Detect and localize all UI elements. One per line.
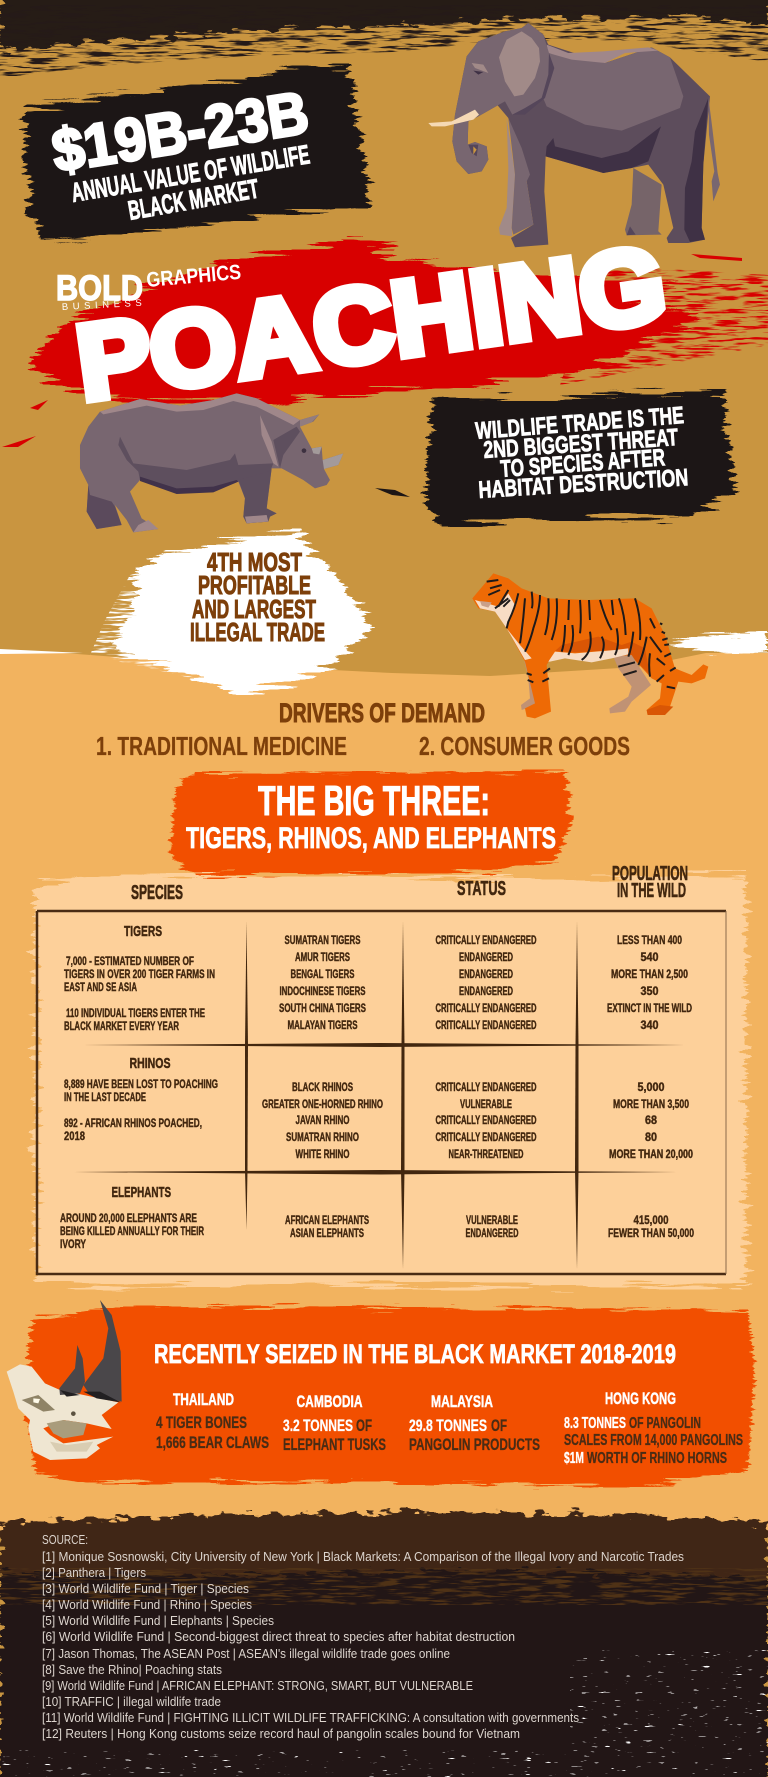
row: rhinos, subspecies: JAVAN RHINO (296, 1115, 350, 1127)
row: tigers, status: CRITICALLY ENDANGERED (436, 1003, 536, 1015)
sources list: [3] World Wildlife Fund | Tiger | Species (42, 1581, 249, 1596)
sources list: [11] World Wildlife Fund | FIGHTING ILLICIT WILDLIFE TRAFFICKING: A consultation with governments (42, 1710, 579, 1725)
background: white ground highlight right (671, 632, 768, 653)
red brush splash (2, 240, 768, 447)
caption line one: ANNUAL VALUE OF WILDLIFE (69, 139, 312, 208)
panel: market value (25, 65, 368, 243)
row: tigers, population: 350 (640, 986, 658, 998)
red splatter left (30, 400, 48, 410)
row: rhinos, population: MORE THAN 20,000 (609, 1149, 693, 1161)
headline value: $19B-23B (48, 79, 313, 185)
row: rhinos, population: MORE THAN 3,500 (613, 1099, 689, 1111)
column: Hong Kong: HONG KONG (605, 1389, 676, 1408)
column: Cambodia: OF (356, 1416, 372, 1435)
row: tigers, population: MORE THAN 2,500 (611, 969, 688, 981)
heading line one: THE BIG THREE: (258, 777, 490, 824)
row: tigers, population (607, 935, 692, 1032)
row: rhinos, status (436, 1082, 536, 1161)
main red stroke (24, 240, 700, 403)
row: tigers, subspecies: AMUR TIGERS (295, 952, 350, 964)
icon: tiger (472, 573, 708, 718)
black specks (375, 488, 410, 497)
header population: POPULATION (612, 863, 688, 885)
row: tigers, species notes: TIGERS IN OVER 200 TIGER FARMS IN (64, 969, 215, 981)
driver two: 2. CONSUMER GOODS (419, 731, 630, 761)
logo word BOLD: BOLD (56, 269, 143, 308)
row: rhinos, population (609, 1082, 693, 1161)
logo word GRAPHICS: GRAPHICS (145, 261, 242, 292)
row: elephants, population (608, 1215, 694, 1240)
driver one: 1. TRADITIONAL MEDICINE (96, 731, 347, 761)
header species: SPECIES (131, 882, 183, 904)
sources list (42, 1532, 684, 1741)
column: Hong Kong: $1M (564, 1450, 584, 1467)
row: elephants, status: ENDANGERED (466, 1228, 518, 1240)
callout text line four: HABITAT DESTRUCTION (478, 464, 689, 504)
row: tigers, species notes (64, 923, 215, 1033)
row: tigers, species notes: 110 INDIVIDUAL TIGERS ENTER THE (66, 1008, 205, 1020)
row: tigers, status: CRITICALLY ENDANGERED (436, 935, 536, 947)
sources list: [8] Save the Rhino| Poaching stats (42, 1662, 222, 1677)
column: Malaysia: OF (491, 1416, 507, 1435)
header status: STATUS (457, 878, 506, 900)
row: tigers, species notes: EAST AND SE ASIA (64, 982, 137, 994)
row: tigers, subspecies: BENGAL TIGERS (290, 969, 355, 981)
column: Malaysia: 29.8 TONNES (409, 1416, 487, 1435)
panel: table background (36, 874, 746, 1286)
row: rhinos, population: 68 (645, 1115, 658, 1127)
top dark brush band (0, 0, 768, 50)
row: elephants, species notes: BEING KILLED ANNUALLY FOR THEIR (60, 1226, 204, 1238)
footer brown streak texture (0, 1568, 768, 1605)
icon: rhino (80, 393, 343, 532)
logo word BUSINESS: BUSINESS (62, 298, 142, 313)
row: elephants, subspecies: ASIAN ELEPHANTS (290, 1228, 364, 1240)
row: tigers, population: 340 (640, 1020, 658, 1032)
title: POACHING (70, 225, 673, 423)
row: rhinos, species notes: 2018 (64, 1131, 85, 1143)
row: rhinos, species notes: RHINOS (130, 1055, 170, 1072)
row: rhinos, status: NEAR-THREATENED (448, 1149, 524, 1161)
heading: drivers of demand: DRIVERS OF DEMAND (279, 698, 485, 728)
row: tigers, species notes: TIGERS (124, 923, 162, 940)
column: Malaysia: MALAYSIA (431, 1392, 493, 1411)
row: rhinos, species notes: 8,889 HAVE BEEN LOST TO POACHING (64, 1079, 218, 1091)
column: Malaysia: PANGOLIN PRODUCTS (409, 1435, 540, 1454)
sources list: SOURCE: (42, 1532, 88, 1547)
row: tigers, status: ENDANGERED (459, 969, 513, 981)
column: Thailand: 4 TIGER BONES (156, 1413, 247, 1432)
caption line two: BLACK MARKET (126, 173, 261, 226)
red streak texture right (560, 265, 768, 385)
callout text line one: WILDLIFE TRADE IS THE (474, 402, 685, 445)
callout text line four: ILLEGAL TRADE (190, 617, 325, 647)
red splatter lower left (2, 436, 36, 447)
row: tigers, population: 540 (640, 952, 658, 964)
row: rhinos, status: CRITICALLY ENDANGERED (436, 1082, 536, 1094)
row: tigers, subspecies: MALAYAN TIGERS (288, 1020, 358, 1032)
row: tigers, species notes: BLACK MARKET EVERY YEAR (64, 1021, 179, 1033)
callout text line three: TO SPECIES AFTER (499, 444, 666, 483)
callout text line two: PROFITABLE (198, 570, 311, 600)
row: elephants, subspecies: AFRICAN ELEPHANTS (285, 1215, 369, 1227)
orange brush shape (24, 1306, 755, 1487)
row: rhinos, species notes (64, 1055, 218, 1143)
row: tigers, status: CRITICALLY ENDANGERED (436, 1020, 536, 1032)
heading panel: the big three (171, 772, 571, 875)
white brush shape (110, 530, 372, 697)
row: rhinos, subspecies: GREATER ONE-HORNED RHINO (262, 1099, 383, 1111)
row: rhinos, population: 80 (645, 1132, 657, 1144)
row: rhinos, subspecies (262, 1082, 383, 1161)
footer brown band (0, 1512, 768, 1610)
row: elephants, species notes: IVORY (60, 1239, 86, 1251)
white streak texture (90, 560, 200, 680)
sources list: [2] Panthera | Tigers (42, 1565, 146, 1580)
sources list: [1] Monique Sosnowski, City University of New York | Black Markets: A Comparison of the Illegal Ivory and Narcotic Trades (42, 1549, 684, 1564)
column: Thailand: THAILAND (173, 1390, 234, 1409)
row: rhinos, subspecies: BLACK RHINOS (292, 1082, 353, 1094)
column: Thailand: 1,666 BEAR CLAWS (156, 1433, 269, 1452)
row: rhinos, population: 5,000 (638, 1082, 664, 1094)
row: elephants, species notes: ELEPHANTS (112, 1184, 171, 1201)
sources list: [4] World Wildlife Fund | Rhino | Species (42, 1597, 252, 1612)
background: tan upper area (0, 0, 768, 660)
column: Cambodia: ELEPHANT TUSKS (283, 1435, 386, 1454)
row: tigers, subspecies: SOUTH CHINA TIGERS (279, 1003, 366, 1015)
column: Cambodia: CAMBODIA (296, 1392, 362, 1411)
top band dark streak texture (0, 5, 768, 78)
column: Hong Kong: OF PANGOLIN (629, 1415, 701, 1432)
panel: recently seized (24, 1306, 755, 1487)
background: white ground highlight left (0, 649, 83, 654)
row: rhinos, status: VULNERABLE (460, 1099, 512, 1111)
footer white specks right (570, 1650, 768, 1777)
row: tigers, status (436, 935, 536, 1032)
row: tigers, status: ENDANGERED (459, 952, 513, 964)
row: tigers, population: LESS THAN 400 (617, 935, 682, 947)
row: tigers, population: EXTINCT IN THE WILD (607, 1003, 692, 1015)
sources list: [7] Jason Thomas, The ASEAN Post | ASEAN's illegal wildlife trade goes online (42, 1646, 450, 1661)
row: elephants, subspecies (285, 1215, 369, 1240)
row: tigers, subspecies: SUMATRAN TIGERS (284, 935, 361, 947)
column: Thailand (156, 1390, 269, 1452)
column: Hong Kong (564, 1389, 743, 1467)
panel: fourth most profitable (90, 530, 372, 697)
row: rhinos, status: CRITICALLY ENDANGERED (436, 1115, 536, 1127)
column: Cambodia (283, 1392, 386, 1454)
table frame (37, 911, 726, 1274)
column: Cambodia: 3.2 TONNES (283, 1416, 353, 1435)
sources list: [12] Reuters | Hong Kong customs seize record haul of pangolin scales bound for Vietnam (42, 1726, 520, 1741)
background: tan ground hump under tiger (64, 653, 706, 676)
row: elephants, population: FEWER THAN 50,000 (608, 1228, 694, 1240)
row: rhinos, species notes: IN THE LAST DECADE (64, 1092, 146, 1104)
footer dark band (0, 1570, 768, 1777)
row: rhinos, subspecies: WHITE RHINO (296, 1149, 350, 1161)
orange brush shape (171, 772, 571, 875)
row: rhinos, species notes: 892 - AFRICAN RHINOS POACHED, (64, 1118, 202, 1130)
logo: Bold Business Graphics (56, 261, 242, 313)
callout text line one: 4TH MOST (207, 547, 302, 577)
row: tigers, status: ENDANGERED (459, 986, 513, 998)
row: elephants, population: 415,000 (634, 1215, 668, 1227)
icon: rhino skull (7, 1300, 122, 1460)
background: light sand lower area (0, 653, 768, 1533)
row: elephants, status (466, 1215, 518, 1240)
heading line two: TIGERS, RHINOS, AND ELEPHANTS (186, 822, 556, 855)
column: Malaysia (409, 1392, 540, 1454)
black brush shape (426, 392, 735, 523)
sources list: [5] World Wildlife Fund | Elephants | Species (42, 1613, 274, 1628)
row: elephants, status: VULNERABLE (466, 1215, 518, 1227)
callout text line two: 2ND BIGGEST THREAT (483, 424, 679, 464)
sources list: [9] World Wildlife Fund | AFRICAN ELEPHANT: STRONG, SMART, BUT VULNERABLE (42, 1678, 473, 1693)
row: elephants, species notes (60, 1184, 204, 1251)
callout text line three: AND LARGEST (192, 594, 316, 624)
icon: elephant (428, 23, 720, 247)
column: Hong Kong: 8.3 TONNES (564, 1415, 626, 1432)
panel: threat callout (375, 392, 735, 523)
sources list: [10] TRAFFIC | illegal wildlife trade (42, 1694, 221, 1709)
sources list: [6] World Wildlife Fund | Second-biggest direct threat to species after habitat destruction (42, 1629, 515, 1644)
red streak right (691, 254, 742, 261)
row: rhinos, subspecies: SUMATRAN RHINO (286, 1132, 359, 1144)
row: tigers, species notes: 7,000 - ESTIMATED NUMBER OF (66, 956, 194, 968)
row: tigers, subspecies: INDOCHINESE TIGERS (280, 986, 366, 998)
table headers (131, 863, 688, 904)
row: elephants, species notes: AROUND 20,000 ELEPHANTS ARE (60, 1213, 197, 1225)
black brush shape (25, 65, 368, 243)
footer white specks bottom (0, 1750, 570, 1777)
header in the wild: IN THE WILD (617, 880, 686, 902)
row: tigers, subspecies (279, 935, 366, 1032)
row: rhinos, status: CRITICALLY ENDANGERED (436, 1132, 536, 1144)
